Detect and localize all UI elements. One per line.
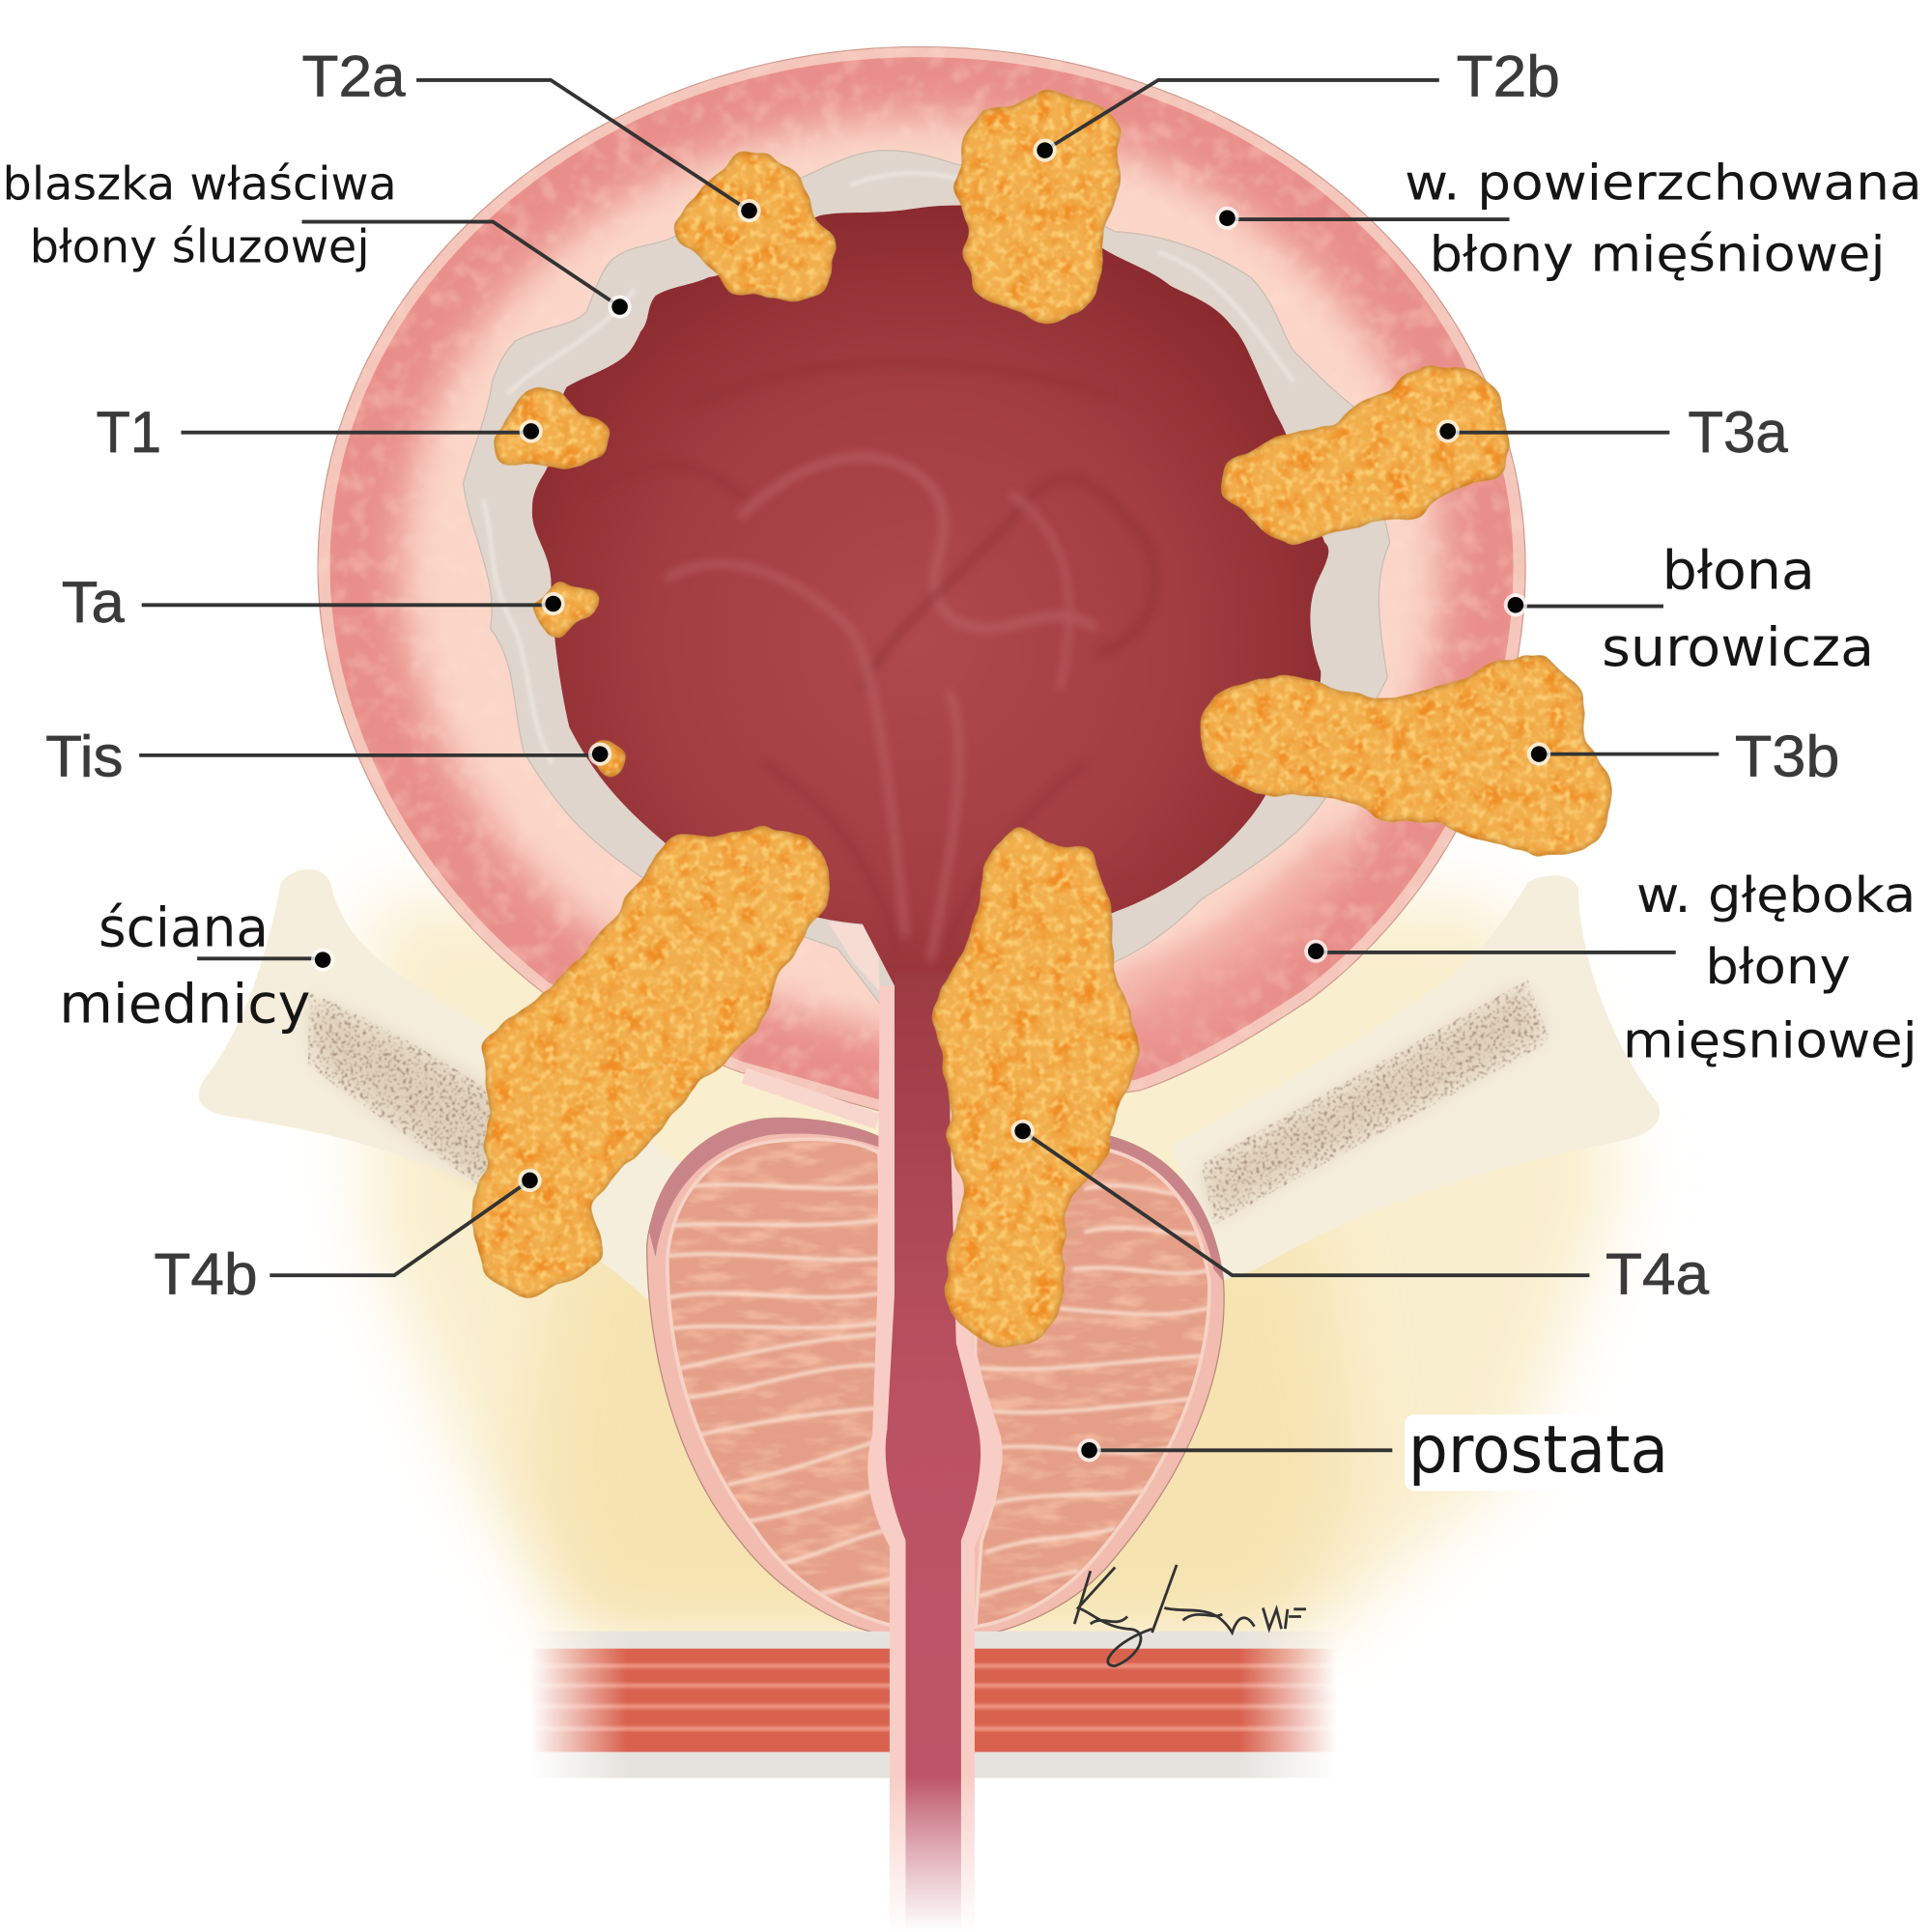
label: w. powierzchowana błony mięśniowej <box>1215 156 1922 284</box>
label: T3b <box>1527 724 1839 789</box>
label: Tis: Tis <box>45 724 124 789</box>
label: prostata: prostata <box>1408 1411 1668 1488</box>
deep muscle layer <box>330 57 1514 1104</box>
urogenital diaphragm muscle <box>529 1632 1343 1778</box>
label: w. powierzchowana błony mięśniowej: błony mięśniowej <box>1430 227 1886 284</box>
superficial muscle layer <box>402 119 1440 1037</box>
label: w. głęboka błony mięsniowej: w. głęboka <box>1636 867 1916 924</box>
tumour T4a <box>933 823 1141 1348</box>
tumour T4b <box>466 823 836 1300</box>
label: T1 <box>96 400 543 465</box>
label: T3b: T3b <box>1735 724 1839 789</box>
prostate left lobe <box>666 1138 890 1627</box>
label: Tis <box>45 724 611 789</box>
label: ściana miednicy: miednicy <box>59 974 310 1037</box>
label: T2b: T2b <box>1457 43 1560 108</box>
right pelvic bone <box>1171 875 1660 1282</box>
signature <box>1074 1565 1306 1665</box>
left pelvic bone <box>199 869 702 1300</box>
bladder neck band <box>744 1076 877 1122</box>
prostate <box>647 1118 1224 1638</box>
bladder wall <box>308 37 1540 1122</box>
label: T2a: T2a <box>301 43 406 108</box>
perivesical fat <box>370 899 1627 1633</box>
label: błona surowicza <box>1504 540 1874 678</box>
label: T4b <box>154 1169 542 1306</box>
label: T3a <box>1436 400 1788 465</box>
tumour T3b <box>1202 653 1616 859</box>
label: w. głęboka błony mięsniowej <box>1304 867 1918 1069</box>
label: w. powierzchowana błony mięśniowej: w. powierzchowana <box>1405 156 1922 213</box>
urethra <box>863 974 1003 1932</box>
label: blaszka właściwa błony śluzowej: błony śluzowej <box>30 221 370 274</box>
lamina propria <box>464 151 1390 1023</box>
label: błona surowicza: surowicza <box>1602 616 1874 678</box>
label: T1: T1 <box>96 400 161 465</box>
label: błona surowicza: błona <box>1662 540 1815 602</box>
prostate right lobe <box>974 1149 1211 1629</box>
label: prostata <box>1077 1411 1673 1491</box>
tumour T2b <box>955 89 1123 327</box>
label: w. głęboka błony mięsniowej: mięsniowej <box>1623 1012 1918 1069</box>
tumour Ta <box>529 574 600 640</box>
bladder lumen <box>532 205 1328 1115</box>
label: blaszka właściwa błony śluzowej: blaszka właściwa <box>3 158 397 212</box>
label: T3a: T3a <box>1688 400 1788 465</box>
label: ściana miednicy <box>59 897 334 1037</box>
tumour T1 <box>493 384 611 472</box>
tumour T3a <box>1216 362 1506 546</box>
label: T4a <box>1011 1120 1710 1306</box>
label: blaszka właściwa błony śluzowej <box>3 158 632 319</box>
bladder neck wedge <box>828 922 880 992</box>
label: ściana miednicy: ściana <box>99 897 269 960</box>
tumour T2a <box>674 147 838 300</box>
mucosal folds <box>591 363 1155 961</box>
inner pink tint <box>1115 827 1340 1013</box>
label: Ta <box>62 570 565 635</box>
label: T2b <box>1034 43 1560 162</box>
label: w. głęboka błony mięsniowej: błony <box>1705 939 1851 996</box>
label: Ta: Ta <box>62 570 126 635</box>
label: T4a: T4a <box>1605 1241 1710 1306</box>
label: T2a <box>301 43 761 222</box>
tumour Tis <box>586 734 623 777</box>
label: T4b: T4b <box>154 1241 258 1306</box>
